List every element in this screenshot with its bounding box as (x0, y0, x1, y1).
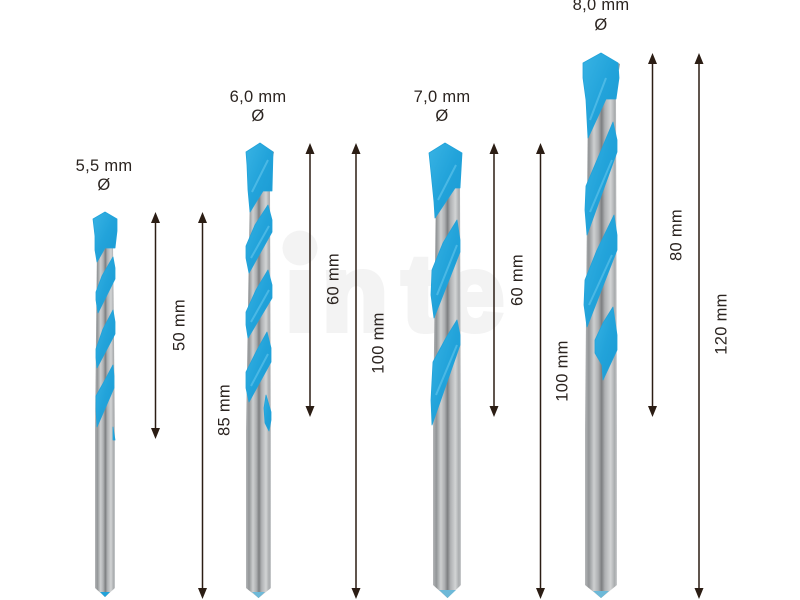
arrow: 100 mm (536, 143, 545, 599)
diameter label 6.0 mm (230, 88, 286, 125)
label: 50 mm: 50 mm (170, 299, 188, 351)
diameter label 7.0 mm: 7,0 mm (414, 88, 470, 106)
watermark: ınte (285, 232, 504, 353)
arrow: 50 mm (151, 212, 160, 439)
arrow: 80 mm (648, 53, 657, 417)
diameter label 5.5 mm: Ø (97, 176, 111, 194)
diameter label 5.5 mm (76, 157, 132, 194)
drill bit 8.0 mm (583, 53, 620, 598)
diameter label 5.5 mm: 5,5 mm (76, 157, 132, 175)
label: 100 mm: 100 mm (554, 340, 572, 402)
drill bit 5.5 mm (93, 212, 117, 597)
drill bit 6.0 mm (246, 143, 274, 598)
label: 120 mm: 120 mm (712, 293, 730, 355)
label: 80 mm: 80 mm (668, 209, 686, 261)
diameter label 6.0 mm: Ø (251, 107, 265, 125)
diameter label 7.0 mm: Ø (435, 107, 449, 125)
arrow: 120 mm (694, 53, 704, 599)
drill bit 7.0 mm (429, 143, 462, 598)
diameter label 8.0 mm (573, 0, 629, 34)
label: 85 mm: 85 mm (216, 384, 234, 436)
arrow: 60 mm (306, 143, 314, 417)
label: 60 mm: 60 mm (324, 253, 342, 305)
label: 100 mm: 100 mm (370, 312, 388, 374)
arrow: 85 mm (198, 212, 207, 599)
diameter label 7.0 mm (414, 88, 470, 125)
arrow: 60 mm (490, 143, 498, 417)
label: 60 mm: 60 mm (508, 254, 526, 306)
arrow: 100 mm (352, 143, 360, 599)
diameter label 6.0 mm: 6,0 mm (230, 88, 286, 106)
diameter label 8.0 mm: Ø (594, 16, 608, 34)
